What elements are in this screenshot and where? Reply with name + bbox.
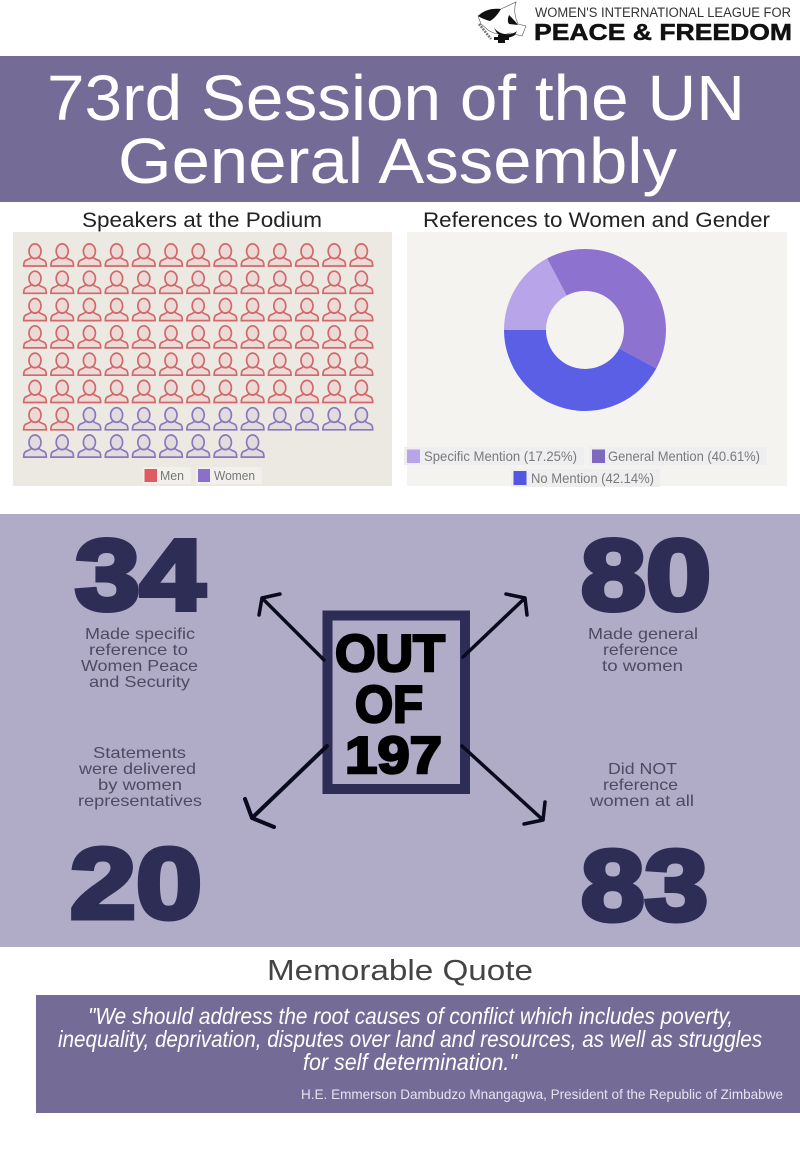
stat: 80	[581, 520, 711, 675]
legend: men and women: Men	[160, 469, 184, 483]
legend: men and women: Women	[214, 469, 255, 483]
panel: speakers at the podium	[13, 209, 392, 486]
legend: men and women	[143, 467, 262, 484]
panel: references to women and gender	[404, 209, 787, 487]
stat: 83: 83	[581, 830, 708, 942]
arrow: bottom left	[245, 746, 327, 827]
heading: references: References to Women and Gender	[423, 209, 770, 232]
stat: 34	[75, 520, 205, 691]
center box: out of 197: OF	[355, 676, 423, 734]
center box: out of 197: 197	[345, 727, 442, 785]
panel: quote	[36, 995, 800, 1113]
center box: out of 197	[328, 616, 465, 789]
quote attribution: H.E. Emmerson Dambudzo Mnangagwa, President of the Republic of Zimbabwe	[301, 1086, 783, 1102]
quote text: "We should address the root causes of conflict which includes poverty,	[88, 1003, 733, 1029]
logo text: league name: WOMEN'S INTERNATIONAL LEAGUE FOR	[535, 5, 791, 20]
stat: 80: to women	[602, 658, 683, 675]
arrow: bottom right	[462, 746, 545, 824]
quote text: for self determination."	[303, 1049, 519, 1075]
stat: 20: 20	[70, 828, 202, 940]
legend: mention categories	[404, 447, 767, 487]
stat: 20: by women	[98, 777, 182, 794]
stat: 83	[581, 761, 708, 942]
stat: 34: reference to	[89, 642, 188, 659]
stat: 20: representatives	[78, 793, 202, 810]
icon: dove with female symbol	[478, 2, 526, 43]
title banner: 73rd Session of the UN	[47, 62, 745, 134]
stat: 34: Women Peace	[81, 658, 198, 675]
stat: 80: 80	[581, 520, 711, 632]
stat: 83: Did NOT	[608, 761, 677, 778]
stat: 83: women at all	[589, 793, 694, 810]
heading: memorable quote: Memorable Quote	[267, 955, 533, 987]
logo text: peace and freedom: PEACE & FREEDOM	[534, 19, 792, 45]
heading: speakers: Speakers at the Podium	[82, 209, 322, 232]
donut chart	[504, 249, 666, 411]
stat: 83: reference	[603, 777, 678, 794]
legend: mention categories: General Mention (40.61%)	[608, 448, 760, 464]
center box: out of 197: OUT	[335, 625, 445, 683]
stat: 20	[70, 745, 202, 940]
stat: 34: 34	[75, 520, 205, 632]
stat: 20: were delivered	[78, 761, 196, 778]
stat: 80: Made general	[588, 626, 698, 643]
panel: out of 197 statistics	[0, 514, 800, 947]
legend: mention categories: No Mention (42.14%)	[531, 470, 654, 486]
arrow: top left	[259, 594, 324, 660]
legend: mention categories: Specific Mention (17.25%)	[424, 448, 577, 464]
stat: 34: Made specific	[85, 626, 195, 643]
stat: 80: reference	[603, 642, 678, 659]
quote text	[58, 1003, 762, 1075]
stat: 20: Statements	[93, 745, 186, 762]
title banner	[0, 56, 800, 202]
stat: 34: and Security	[89, 674, 190, 691]
title banner: General Assembly	[118, 125, 677, 197]
arrow: top right	[463, 594, 527, 657]
pictogram chart: 80 men and 20 women	[24, 244, 373, 430]
logo: WILPF	[478, 2, 792, 45]
